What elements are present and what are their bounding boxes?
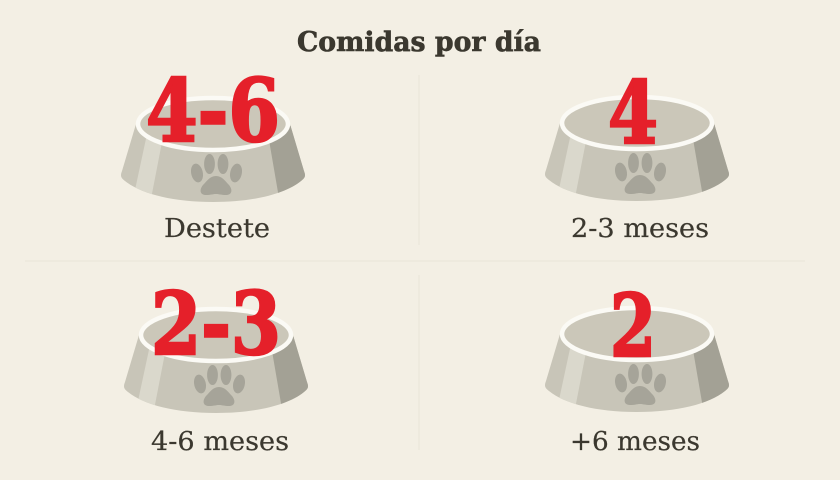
number 2-3: 2-3: [151, 274, 281, 375]
panel: +6 meses: [545, 276, 737, 457]
icon: bowl +6 meses: [545, 308, 737, 414]
number 2: 2: [610, 276, 656, 377]
number 4: 4: [608, 63, 658, 164]
icon: bowl 2-3 meses: [545, 97, 737, 203]
panel: 2-3 meses: [545, 63, 737, 244]
panel: 4-6 meses: [124, 274, 316, 457]
title: Comidas por día: [297, 27, 541, 58]
label +6 meses: +6 meses: [570, 427, 700, 457]
panel: Destete: [121, 61, 313, 244]
icon: bowl Destete: [121, 98, 313, 204]
label 2-3 meses: 2-3 meses: [571, 214, 709, 244]
number 4-6: 4-6: [146, 61, 280, 162]
icon: bowl 4-6 meses: [124, 309, 316, 415]
label 4-6 meses: 4-6 meses: [151, 427, 289, 457]
label Destete: Destete: [164, 214, 270, 244]
